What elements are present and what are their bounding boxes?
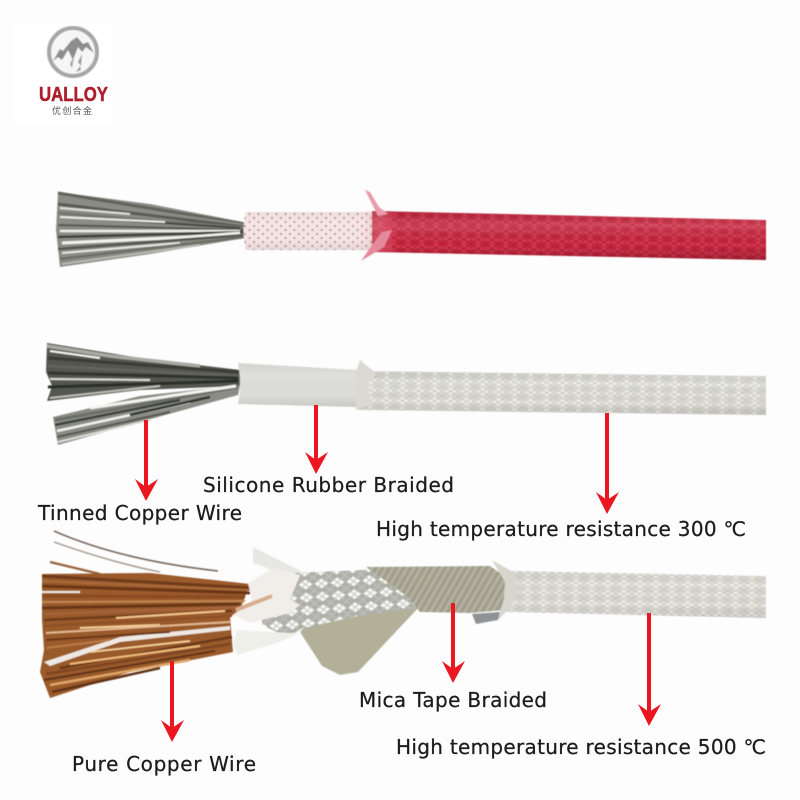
tinned strands xyxy=(46,343,240,445)
frayed end xyxy=(361,190,392,261)
copper strands xyxy=(40,573,250,698)
label: mica tape braided: Mica Tape Braided xyxy=(359,688,547,712)
white dotted sleeve xyxy=(244,212,375,250)
white braid xyxy=(505,571,766,618)
wire 2: white braided cable xyxy=(46,343,766,445)
frayed end xyxy=(356,360,376,410)
silicone sleeve xyxy=(238,363,358,407)
label: tinned copper wire: Tinned Copper Wire xyxy=(37,501,242,525)
label: high temperature resistance 500: High temperature resistance 500 ℃ xyxy=(396,735,766,759)
mica tape flap xyxy=(300,600,420,675)
arrow: mica tape xyxy=(442,603,465,683)
logo: UALLOY xyxy=(14,22,113,125)
arrow: 500 degree braid xyxy=(638,613,661,726)
coarse braid xyxy=(233,547,420,655)
arrow: silicone rubber xyxy=(305,405,328,474)
arrow: pure copper wire xyxy=(161,661,184,742)
wire 3: mica and copper cable xyxy=(40,531,766,698)
label: silicone rubber braided: Silicone Rubber Braided xyxy=(203,473,454,497)
tinned strands xyxy=(56,192,245,267)
label: high temperature resistance 300: High temperature resistance 300 ℃ xyxy=(376,517,746,541)
arrow: 300 degree braid xyxy=(596,413,619,514)
mica braid xyxy=(366,566,510,613)
white braid xyxy=(358,371,766,415)
arrow: tinned copper wire xyxy=(135,420,158,501)
icon: mountain in a ring xyxy=(49,28,97,76)
wire 1: red braided cable xyxy=(56,190,766,267)
frayed end xyxy=(472,560,518,624)
loose copper wires xyxy=(50,531,218,574)
brand name in Chinese: 优创合金 xyxy=(52,105,92,116)
brand name: UALLOY xyxy=(39,84,109,106)
white braid tabs xyxy=(253,547,303,574)
red braid xyxy=(355,211,766,260)
label: pure copper wire: Pure Copper Wire xyxy=(72,752,256,776)
